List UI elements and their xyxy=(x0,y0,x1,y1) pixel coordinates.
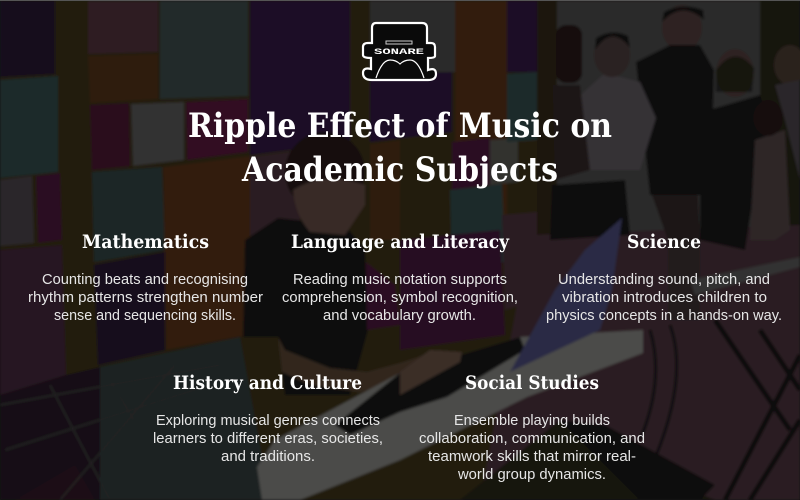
panel: science xyxy=(546,231,782,324)
heading: history and culture: History and Culture xyxy=(173,372,362,394)
text: science description: Understanding sound, pitch, and xyxy=(558,272,770,288)
music stand xyxy=(0,365,220,500)
title: Academic Subjects xyxy=(241,150,558,190)
text: science description: vibration introduces children to xyxy=(562,290,767,306)
text: language description: comprehension, symbol recognition, xyxy=(282,290,518,306)
people xyxy=(662,5,702,51)
text: mathematics description xyxy=(28,272,263,324)
text: language description: Reading music notation supports xyxy=(293,272,507,288)
text: science description: physics concepts in a hands-on way. xyxy=(546,308,782,324)
text: mathematics description: Counting beats and recognising xyxy=(42,272,248,288)
floor right xyxy=(480,225,800,500)
text: social studies description xyxy=(419,413,645,483)
text: social studies description: collaboration, communication, and xyxy=(419,431,645,447)
text: language description xyxy=(282,272,518,324)
text: social studies description: world group dynamics. xyxy=(457,467,606,483)
heading: language and literacy: Language and Literacy xyxy=(291,231,510,253)
text: mathematics description: sense and sequencing skills. xyxy=(54,308,236,324)
title xyxy=(188,106,612,190)
text: history description: Exploring musical genres connects xyxy=(156,413,380,429)
panel: history and culture xyxy=(153,372,383,465)
panel: social studies xyxy=(419,372,645,483)
text: mathematics description: rhythm patterns strengthen number xyxy=(28,290,263,306)
panel: language and literacy xyxy=(282,231,518,324)
heading: science: Science xyxy=(627,231,701,253)
keyboard xyxy=(257,330,643,500)
panel: mathematics xyxy=(28,231,263,324)
chair xyxy=(550,180,630,240)
lower-right gear xyxy=(460,420,715,500)
boy xyxy=(243,218,368,395)
heading: social studies: Social Studies xyxy=(465,372,599,394)
logo: Sonare piano badge xyxy=(363,23,436,80)
floor left area xyxy=(60,337,270,500)
logo: Sonare piano badge: SONARE xyxy=(374,47,424,57)
text: social studies description: Ensemble playing builds xyxy=(454,413,610,429)
text: science description xyxy=(546,272,782,324)
text: language description: and vocabulary growth. xyxy=(323,308,476,324)
text: social studies description: teamwork skills that mirror real- xyxy=(428,449,636,465)
text: history description: learners to different eras, societies, xyxy=(153,431,383,447)
text: history description xyxy=(153,413,383,465)
text: history description: and traditions. xyxy=(221,449,315,465)
title: Ripple Effect of Music on xyxy=(188,106,612,146)
sheet music xyxy=(510,218,622,372)
heading: mathematics: Mathematics xyxy=(82,231,209,253)
